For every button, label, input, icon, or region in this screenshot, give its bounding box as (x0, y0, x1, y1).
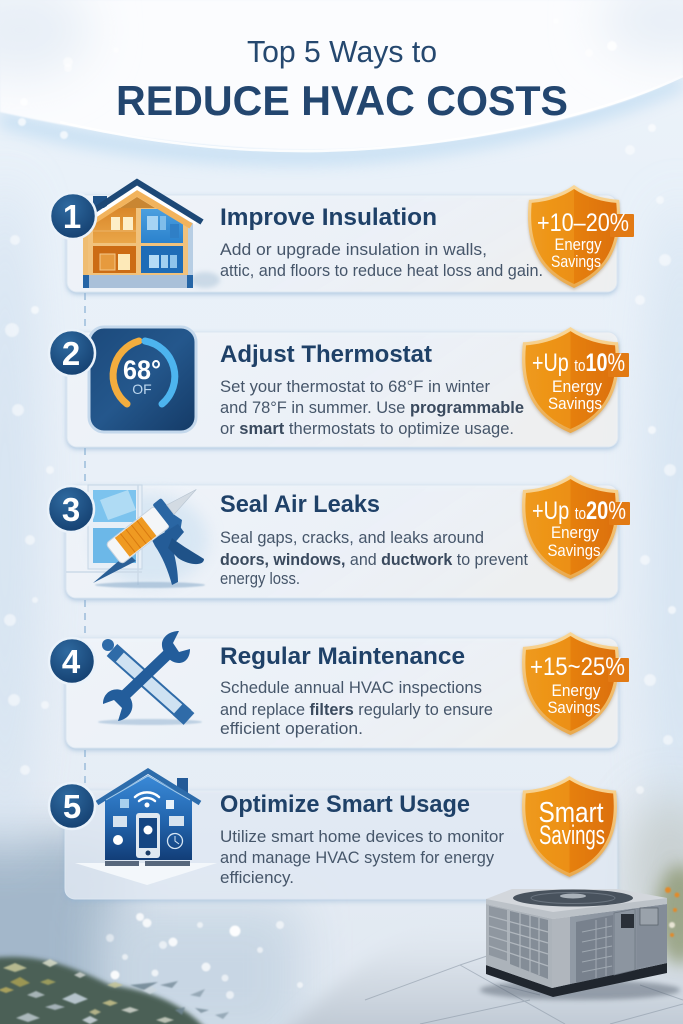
text: insulation description: Add or upgrade insulation in walls, (220, 240, 487, 259)
icon: insulated house (83, 182, 220, 288)
badge: smart savings shield (522, 776, 617, 877)
AC base (486, 963, 667, 997)
panel: step 1 improve insulation (50, 182, 634, 292)
text: thermostat description: Set your thermostat to 68°F in winter (220, 377, 490, 396)
badge: +up to 10% energy savings shield: Savings (548, 394, 602, 413)
text: smart usage description: Utilize smart home devices to monitor (220, 827, 504, 846)
badge: number 2: 2 (62, 335, 80, 372)
card 2 (67, 332, 618, 447)
heading: regular maintenance: Regular Maintenance (220, 643, 465, 670)
AC top and fan (486, 889, 667, 919)
badge: +up to 20% energy savings shield: Savings (548, 541, 600, 560)
badge: smart savings shield: Savings (539, 820, 605, 850)
badge: +up to 10% energy savings shield: +Up to10% (532, 349, 625, 377)
text: smart usage description: and manage HVAC system for energy (220, 848, 494, 867)
text: thermostat description: and 78°F in summer. Use programmable (220, 398, 524, 417)
text: insulation description (220, 240, 543, 280)
badge: +up to 10% energy savings shield: Energy (552, 377, 602, 396)
panel: step 5 optimize smart usage (49, 771, 617, 899)
bush bottom left (0, 957, 229, 1024)
title: Top 5 Ways to (247, 34, 437, 69)
outdoor AC unit (480, 889, 680, 1000)
heading: seal air leaks: Seal Air Leaks (220, 491, 380, 518)
icon: thermostat (89, 327, 196, 432)
card 4 (66, 638, 618, 748)
heading: adjust thermostat: Adjust Thermostat (220, 341, 432, 368)
badge: number 1: 1 (63, 198, 81, 235)
card 3 (66, 485, 618, 598)
badge: +15~25% energy savings shield (522, 632, 629, 735)
badge: number 5: 5 (63, 788, 81, 825)
text: smart usage description: efficiency. (220, 868, 294, 887)
badge: +up to 20% energy savings shield: Energy (551, 523, 599, 542)
AC right face (552, 903, 667, 988)
text: maintenance description (220, 678, 493, 738)
card 1 (67, 195, 617, 292)
panel: step 2 adjust thermostat (49, 327, 629, 447)
badge: number 3: 3 (62, 491, 80, 528)
text: maintenance description: efficient operation. (220, 719, 363, 738)
icon: thermostat: OF (132, 381, 152, 397)
text: maintenance description: and replace filters regularly to ensure (220, 700, 493, 719)
title (116, 34, 568, 124)
icon: crossed filter tube and wrench (98, 631, 202, 725)
text: thermostat description (220, 377, 524, 438)
badge: +up to 20% energy savings shield (522, 475, 630, 579)
icon: window and caulk gun (66, 478, 208, 588)
badge: number 5 (49, 783, 95, 829)
badge: +10-20% energy savings shield (528, 185, 634, 288)
badge: number 1 (50, 193, 96, 239)
text: air leaks description: Seal gaps, cracks, and leaks around (220, 528, 484, 547)
badge: +15~25% energy savings shield: Energy (552, 681, 601, 700)
text: air leaks description (220, 528, 528, 588)
icon: smart home (75, 771, 217, 885)
badge: +up to 20% energy savings shield: +Up to20% (532, 497, 626, 525)
bush bottom right (656, 865, 683, 965)
text: maintenance description: Schedule annual HVAC inspections (220, 678, 482, 697)
badge: +10-20% energy savings shield: Savings (551, 252, 601, 271)
badge: +15~25% energy savings shield: Savings (548, 698, 600, 717)
badge: +15~25% energy savings shield: +15~25% (530, 653, 625, 681)
paving at the bottom (260, 920, 683, 1024)
text: thermostat description: or smart thermostats to optimize usage. (220, 419, 514, 438)
badge: smart savings shield: Smart (538, 797, 604, 829)
heading: optimize smart usage: Optimize Smart Usage (220, 791, 470, 818)
left dashed connector line (84, 293, 86, 790)
badge: +10-20% energy savings shield: Energy (554, 235, 602, 254)
card 5 (65, 790, 617, 899)
text: air leaks description: energy loss. (220, 569, 300, 588)
panel: step 3 seal air leaks (48, 475, 630, 598)
badge: number 4 (49, 638, 95, 684)
title backdrop swoosh (0, 0, 683, 156)
text: air leaks description: doors, windows, and ductwork to prevent (220, 550, 528, 569)
badge: +10-20% energy savings shield: +10–20% (537, 209, 629, 237)
text: smart usage description (220, 827, 504, 887)
text: insulation description: attic, and floors to reduce heat loss and gain. (220, 261, 543, 280)
AC left grille face (486, 903, 552, 988)
badge: number 2 (49, 330, 95, 376)
badge: number 3 (48, 486, 94, 532)
icon: thermostat: 68° (123, 355, 161, 385)
badge: +up to 10% energy savings shield (522, 327, 629, 433)
badge: number 4: 4 (62, 643, 81, 680)
title: REDUCE HVAC COSTS (116, 77, 568, 124)
heading: improve insulation: Improve Insulation (220, 204, 437, 231)
panel: step 4 regular maintenance (49, 631, 629, 748)
